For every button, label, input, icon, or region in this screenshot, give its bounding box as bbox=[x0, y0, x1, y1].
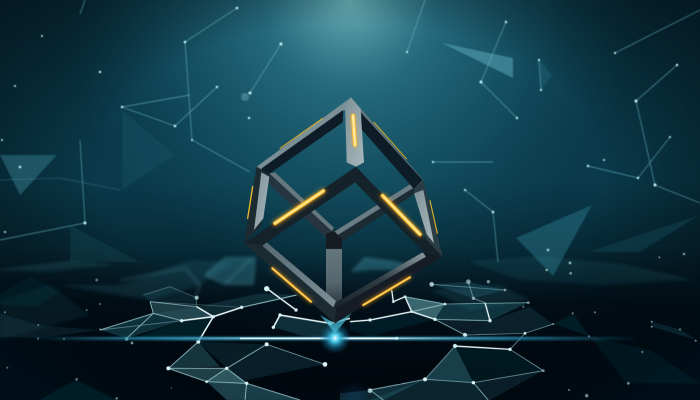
distant blurred mesh bbox=[0, 258, 690, 340]
soft cyan reflection under cube bbox=[320, 313, 352, 333]
yellow light bars bbox=[248, 116, 437, 305]
horizontal light beam bbox=[30, 336, 640, 341]
back bars of cube bbox=[267, 172, 415, 305]
top left edge bbox=[257, 97, 351, 173]
nodes right bbox=[368, 256, 697, 397]
cube bbox=[244, 97, 443, 333]
top vertical post bbox=[345, 97, 364, 167]
bright links left bbox=[100, 287, 325, 400]
front right arm bbox=[355, 167, 443, 257]
top right edge bbox=[351, 97, 423, 189]
right post bbox=[414, 180, 443, 257]
foreground network left bbox=[0, 277, 350, 400]
yellow glow lights bbox=[272, 116, 420, 305]
front left arm bbox=[244, 167, 356, 246]
mesh faces right bbox=[340, 282, 700, 400]
light spot on the beam bbox=[319, 322, 366, 400]
bright links right bbox=[370, 282, 553, 400]
foreground network right bbox=[340, 256, 700, 400]
upper constellation dots bbox=[1, 7, 685, 264]
brightest links left bbox=[182, 288, 350, 342]
bottom right arm bbox=[335, 252, 443, 323]
floating translucent triangles bbox=[0, 43, 700, 276]
nodes left bbox=[4, 279, 332, 400]
upper constellation lines bbox=[0, 0, 700, 262]
bottom left arm bbox=[244, 242, 337, 323]
left post bbox=[244, 167, 270, 243]
mesh faces left bbox=[0, 277, 350, 400]
cube body, softly focused bbox=[244, 97, 443, 333]
brightest links right bbox=[350, 290, 510, 349]
